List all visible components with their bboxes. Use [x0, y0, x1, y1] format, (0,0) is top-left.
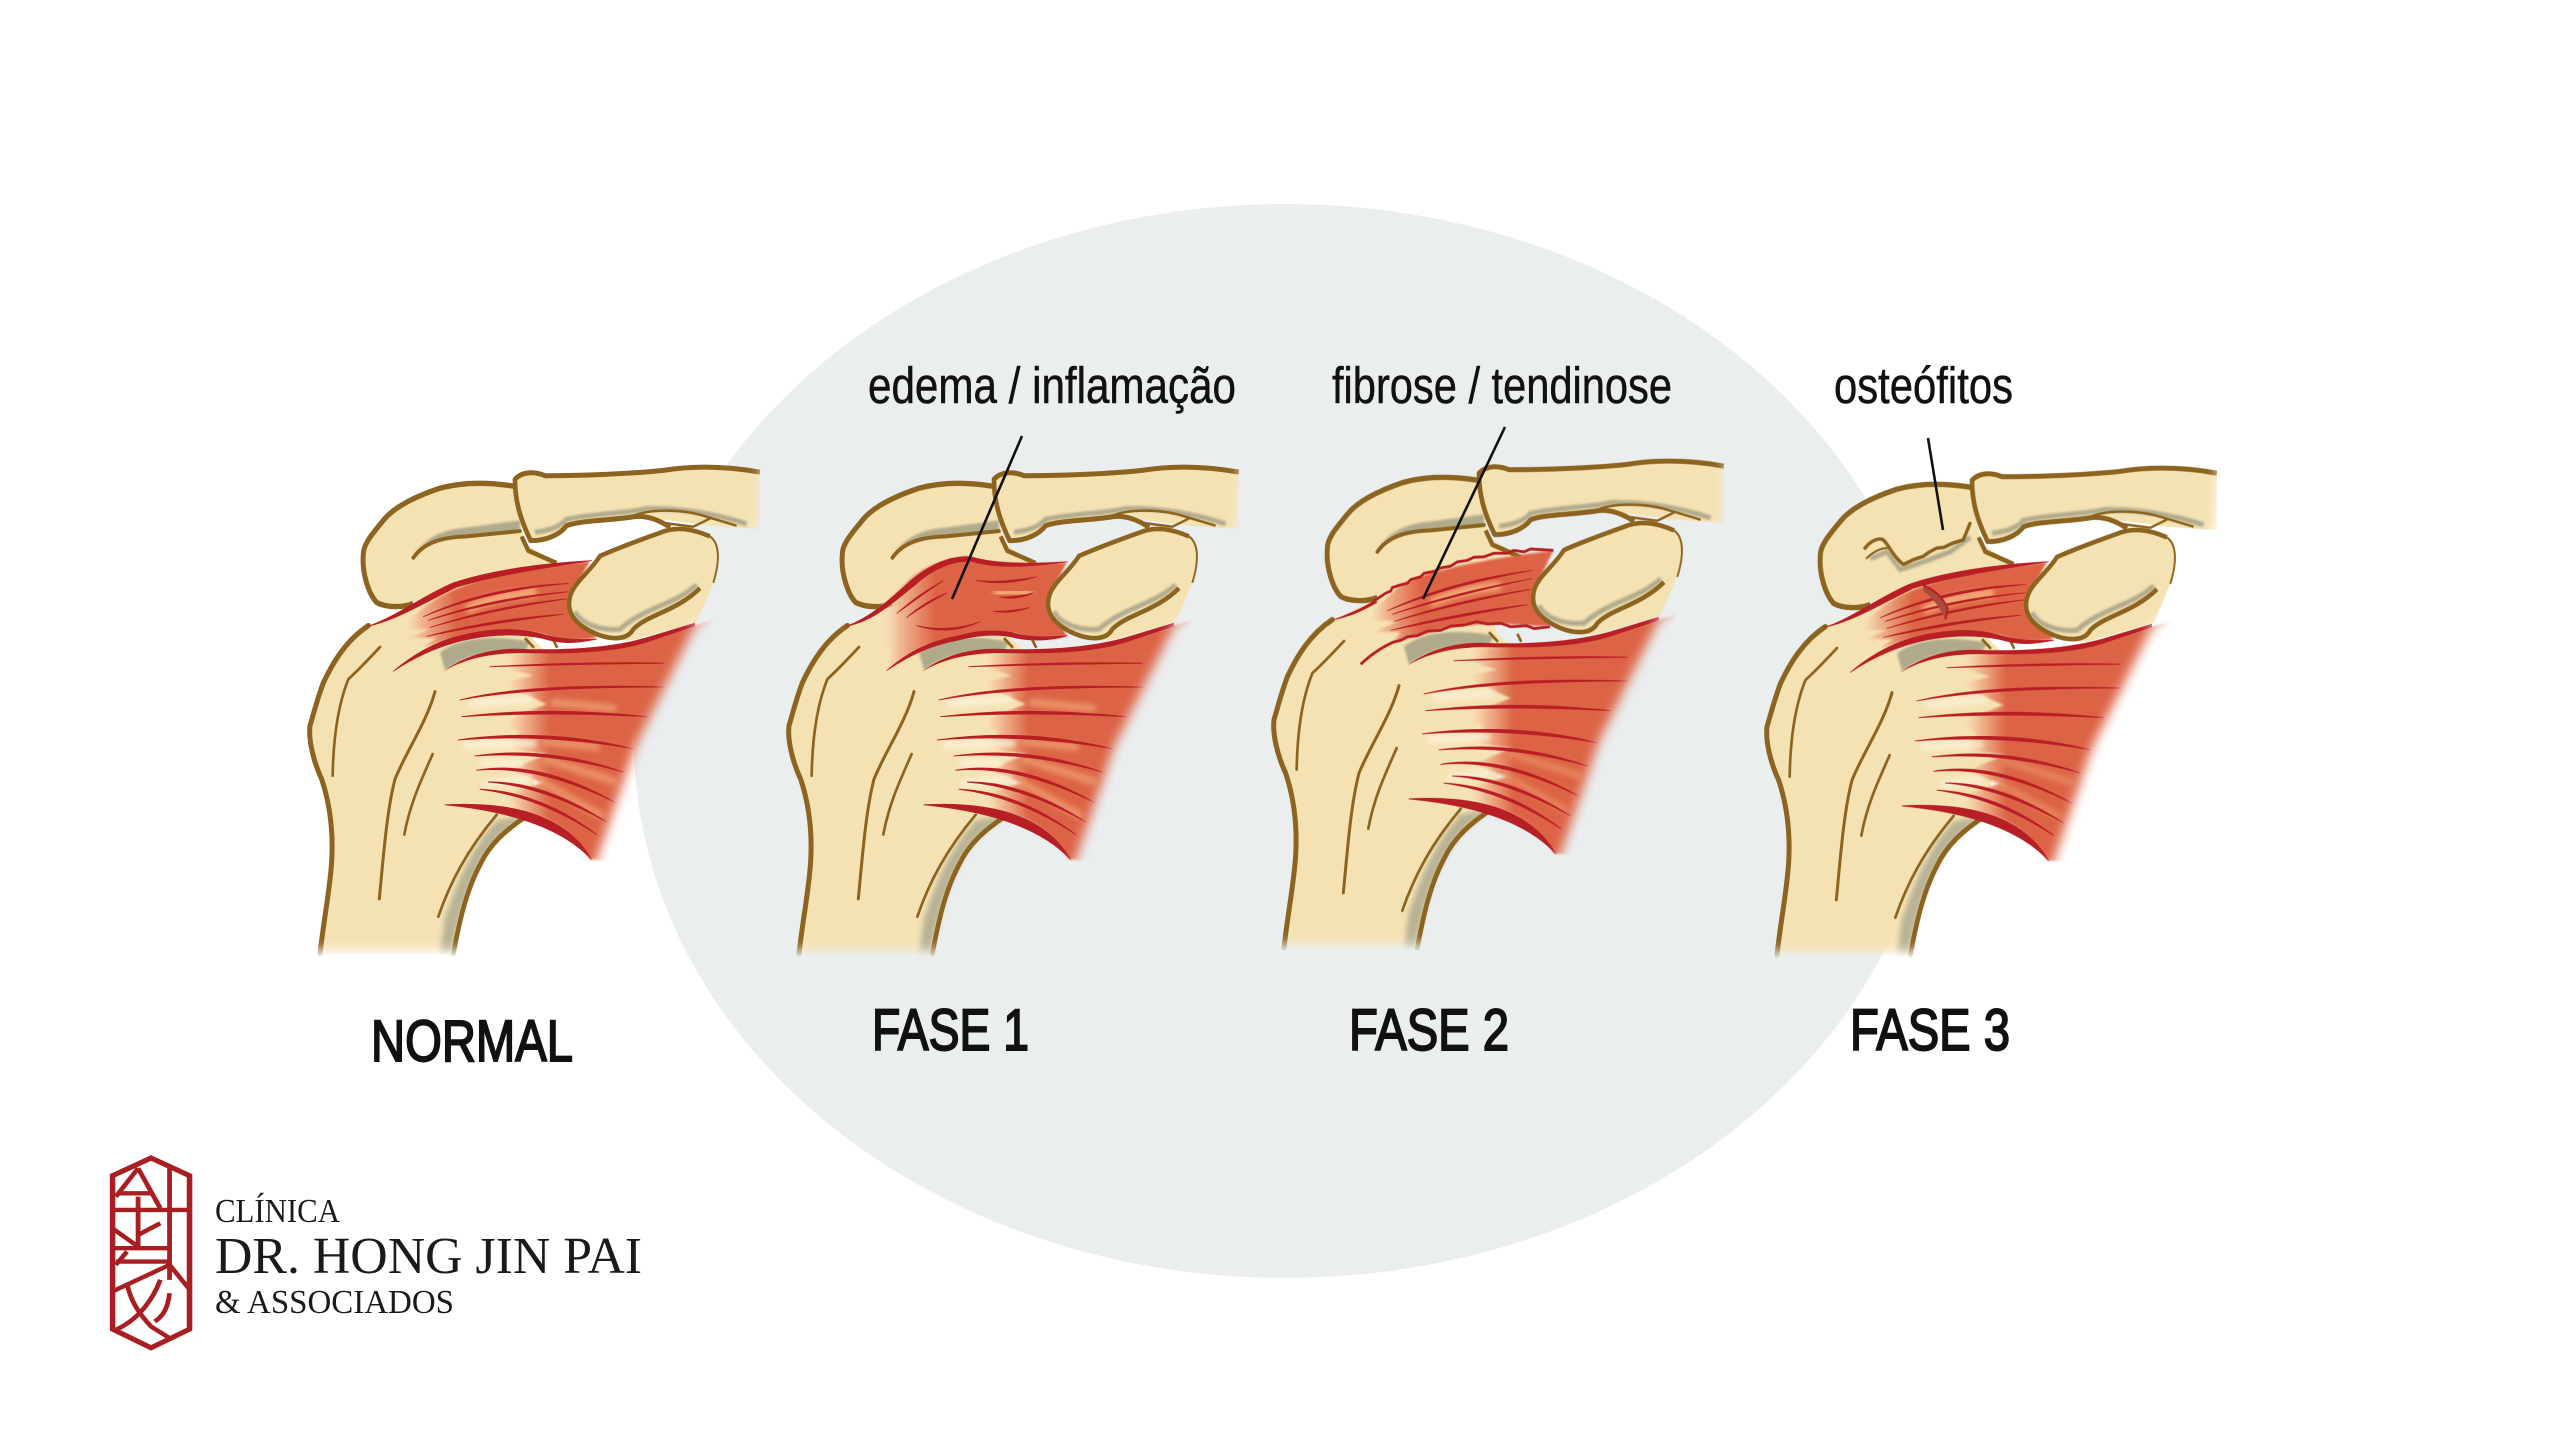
panel: phase 3 shoulder with osteophytes: [1767, 468, 2217, 955]
callout line: fibrosis: [1423, 427, 1505, 599]
annotation: fibrosis: fibrose / tendinose: [1332, 357, 1672, 414]
background ellipse: [634, 204, 1936, 1278]
annotation: edema: edema / inflamação: [868, 357, 1236, 414]
annotation: osteophytes: osteófitos: [1834, 357, 2013, 414]
logo text: & ASSOCIADOS: [215, 1284, 454, 1321]
stage label: phase 1: FASE 1: [872, 998, 1029, 1063]
logo text: [215, 1193, 642, 1321]
callout line: osteophytes: [1928, 438, 1943, 530]
panel: phase 2 shoulder with fibrosis: [1274, 461, 1724, 948]
panel: phase 1 shoulder with edema: [789, 467, 1239, 954]
logo emblem: [112, 1158, 190, 1348]
stage label: phase 2: FASE 2: [1349, 998, 1509, 1063]
stage label: phase 3: FASE 3: [1850, 998, 2010, 1063]
callout line: edema: [952, 436, 1022, 599]
stage label: normal: NORMAL: [371, 1009, 573, 1074]
logo text: DR. HONG JIN PAI: [215, 1228, 642, 1285]
panel: normal shoulder: [310, 467, 760, 954]
logo text: CLÍNICA: [215, 1193, 340, 1230]
